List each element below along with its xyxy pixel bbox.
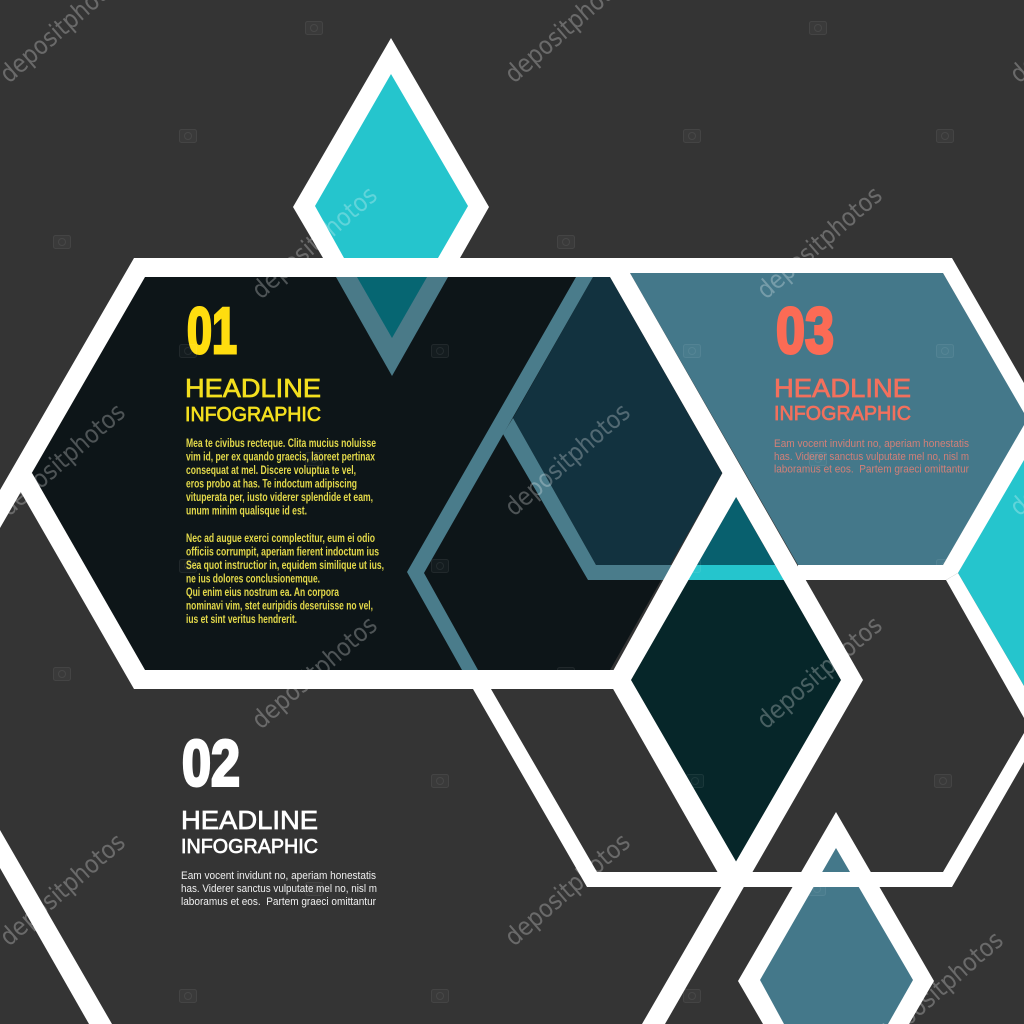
subheading 02: INFOGRAPHIC [181,836,318,858]
panel: hexagon 03 [630,273,1024,565]
panel: central diamond [631,497,841,862]
number 01: 01 [187,294,237,367]
body text 01: Mea te civibus recteque. Clita mucius noluisse [186,438,376,450]
body text 03: has. Viderer sanctus vulputate mel no, nisl m [774,451,969,463]
overlap: diamond reflection outer [336,277,448,376]
body text 03 [774,438,969,476]
panel: right cyan hexagon [958,457,1024,686]
text block: section 03 [774,294,969,476]
body text 01: eros probo at has. Te indoctum adipiscing [186,478,357,490]
text block: section 02 [181,726,377,908]
heading 01: HEADLINE [185,373,321,403]
body text 02: laboramus et eos. Partem graeci omittantur [181,896,376,908]
watermark: depositphotos text: depositphotos [246,180,383,305]
body text 01: vim id, per ex quando graecis, laoreet pertinax [186,452,375,464]
body text 01: nominavi vim, stet euripidis deseruisse no vel, [186,600,373,612]
body text 01: officiis corrumpit, aperiam fierent indoctum ius [186,546,379,558]
body text 03: Eam vocent invidunt no, aperiam honestatis [774,438,969,450]
watermark: depositphotos text: depositphotos [751,180,888,305]
heading 02: HEADLINE [181,805,318,835]
body text 02 [181,870,377,908]
text block: section 01 [185,294,384,626]
body text 02: has. Viderer sanctus vulputate mel no, nisl m [181,883,377,895]
white hexagon outlines [0,258,1024,1024]
body text 01: Nec ad augue exerci complectitur, eum ei odio [186,533,375,545]
body text 01: vituperata per, iusto viderer splendide et eam, [186,492,373,504]
watermark: depositphotos text: depositphotos [499,397,636,522]
number 03: 03 [776,294,834,367]
body text 01: consequat at mel. Discere voluptua te vel, [186,465,356,477]
subheading 03: INFOGRAPHIC [774,403,911,425]
body text 01: Qui enim eius nostrum ea. An corpora [186,587,339,599]
overlap: teal outline long [407,277,593,670]
body text 01: Sea quot instructior in, equidem similique ut ius, [186,560,384,572]
subheading 01: INFOGRAPHIC [185,404,321,426]
overlap: diamond reflection inner [357,277,427,338]
number 02: 02 [182,726,240,800]
watermark: depositphotos text: depositphotos [751,610,888,735]
body text 01 [186,438,384,626]
panel: bottom diamond [738,812,934,1024]
body text 02: Eam vocent invidunt no, aperiam honestatis [181,870,376,882]
body text 01: unum minim qualisque id est. [186,506,307,518]
body text 01: ius et sint veritus hendrerit. [186,614,297,626]
panel: top diamond [293,38,489,258]
watermark: depositphotos text: depositphotos [499,827,636,952]
watermark: depositphotos text: depositphotos [246,610,383,735]
panel: hexagon 01 [32,277,722,670]
overlap: teal outline short [503,418,700,580]
body text 01: ne ius dolores conclusionemque. [186,574,320,586]
body text 03: laboramus et eos. Partem graeci omittantur [774,464,969,476]
heading 03: HEADLINE [774,373,911,403]
overlap: dark teal hexagon part [513,277,722,565]
